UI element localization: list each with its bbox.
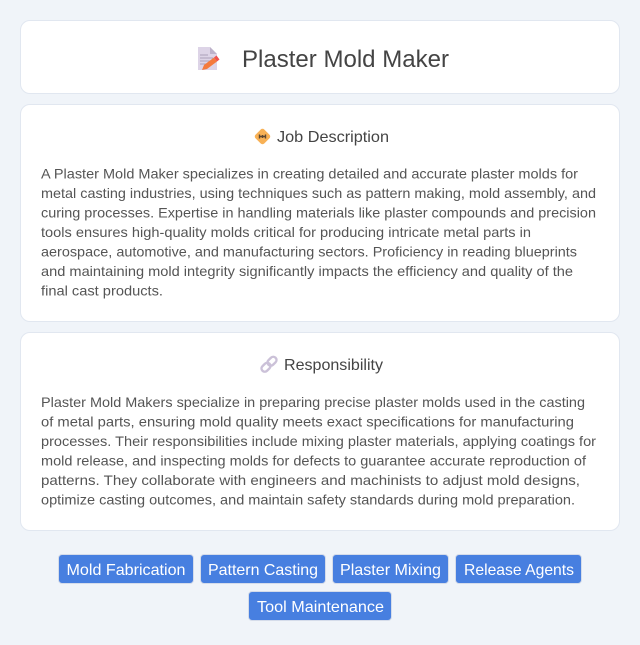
tag: Plaster Mixing background [332,554,449,584]
icon: warning diamond [254,128,271,145]
heading: job description: Job Description [277,129,389,146]
tag: Mold Fabrication background [58,554,194,584]
text block: job description: aerospace, automotive, and manufacturing sectors. Proficiency in reading blueprints [41,244,577,260]
text block: job description: curing processes. Expertise in handling materials like plaster compounds and precision [41,204,596,220]
text block: job description: metal casting industries, using techniques such as pattern making, mold assembly, and [41,185,596,201]
heading: responsibility: Responsibility [284,357,383,374]
text block: responsibility: Plaster Mold Makers specialize in preparing precise plaster molds used in the casting [41,394,585,410]
text block: responsibility: mold release, and inspecting molds for defects to guarantee accurate reproduction of [41,452,586,468]
icon: chain link [260,355,278,373]
text block: job description: final cast products. [41,282,163,298]
text block: job description: A Plaster Mold Maker specializes in creating detailed and accurate plaster molds for [41,166,578,182]
text block: responsibility: of metal parts, ensuring mold quality meets exact specifications for manufacturing [41,414,574,430]
text block: responsibility [41,394,596,508]
icon: document with pencil [198,47,220,70]
tag labels: Mold Fabrication [66,562,186,579]
text block: responsibility: optimize casting outcomes, and maintain safety standards during mold preparation. [41,492,575,508]
tag labels [66,562,574,616]
text block: responsibility: patterns. They collaborate with engineers and machinists to adjust mold designs, [41,472,580,488]
tag: Tool Maintenance background [248,591,392,621]
text block: responsibility: processes. Their responsibilities include mixing plaster materials, applying coatings for [41,433,596,449]
title: Plaster Mold Maker [242,46,449,73]
tag: Pattern Casting background [200,554,326,584]
tag: Release Agents background [455,554,582,584]
tag labels: Pattern Casting [208,562,318,579]
text block: job description [41,166,596,298]
text block: job description: and maintaining mold integrity significantly impacts the efficiency and quality of the [41,263,573,279]
panel: job description card [20,104,620,322]
text block: job description: tools ensures high-quality molds critical for producing intricate metal parts in [41,224,531,240]
panel: responsibility card [20,332,620,531]
tag labels: Tool Maintenance [257,599,384,616]
panel: title card [20,20,620,94]
tag labels: Release Agents [464,562,574,579]
tag labels: Plaster Mixing [340,562,441,579]
